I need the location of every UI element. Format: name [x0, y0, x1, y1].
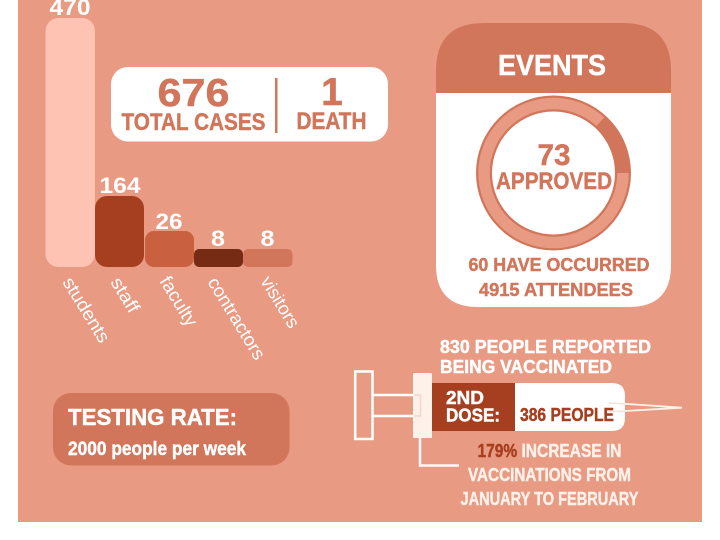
- vaccination increase text: [460, 441, 638, 509]
- bar: staff: 164: [100, 173, 141, 198]
- bar: visitors: 8: [260, 226, 274, 251]
- heading: events: EVENTS: [498, 50, 606, 82]
- stat: total cases: [122, 72, 266, 136]
- donut label: [496, 139, 612, 195]
- vaccination heading: [440, 336, 651, 377]
- events text: 4915 ATTENDEES: [479, 280, 633, 300]
- bar: contractors: 8: [211, 226, 225, 251]
- stat: total cases: 676: [158, 72, 230, 115]
- vaccination increase text: VACCINATIONS FROM: [468, 465, 631, 485]
- second dose block: [432, 383, 515, 431]
- label: visitors: visitors: [257, 272, 304, 332]
- label: contractors: contractors: [204, 273, 270, 363]
- barrel: [432, 383, 625, 431]
- bar: students: [46, 0, 95, 267]
- bar: contractors: [194, 226, 243, 267]
- plunger: [372, 395, 420, 416]
- events text: [468, 255, 650, 300]
- label: faculty: faculty: [156, 272, 203, 331]
- totals card: [111, 67, 388, 142]
- testing rate value: 2000 people per week: [68, 439, 246, 460]
- stat: death: [296, 71, 366, 135]
- bar: faculty: 26: [156, 209, 182, 234]
- donut chart: [484, 104, 623, 242]
- flange: [413, 373, 432, 438]
- panel: events: [436, 23, 671, 307]
- bar: visitors: [243, 226, 292, 267]
- panel: testing rate: [53, 393, 290, 466]
- events text: 60 HAVE OCCURRED: [468, 255, 650, 275]
- leader line: [420, 438, 459, 466]
- bar: staff: [95, 173, 144, 267]
- vaccination heading: BEING VACCINATED: [440, 356, 612, 377]
- vaccination increase text: 179% INCREASE IN: [478, 441, 622, 461]
- second dose block: DOSE:: [446, 406, 500, 426]
- bar chart: cases by group: [46, 0, 304, 363]
- icon: syringe: [355, 372, 682, 466]
- donut label: 73: [538, 139, 570, 172]
- testing rate heading: TESTING RATE:: [68, 404, 237, 430]
- stat: death: DEATH: [296, 108, 366, 135]
- axis labels: [59, 272, 304, 363]
- second dose block: 2ND: [446, 388, 484, 408]
- label: students: students: [59, 273, 115, 346]
- vaccination heading: 830 PEOPLE REPORTED: [440, 336, 651, 357]
- bar: faculty: [145, 209, 194, 267]
- needle: [625, 404, 682, 411]
- stat: total cases: TOTAL CASES: [122, 109, 266, 136]
- donut label: APPROVED: [496, 168, 612, 195]
- vaccination increase text: JANUARY TO FEBRUARY: [460, 489, 638, 509]
- stat: death: 1: [321, 71, 343, 114]
- second dose count: 386 PEOPLE: [520, 405, 614, 425]
- label: staff: staff: [107, 273, 145, 317]
